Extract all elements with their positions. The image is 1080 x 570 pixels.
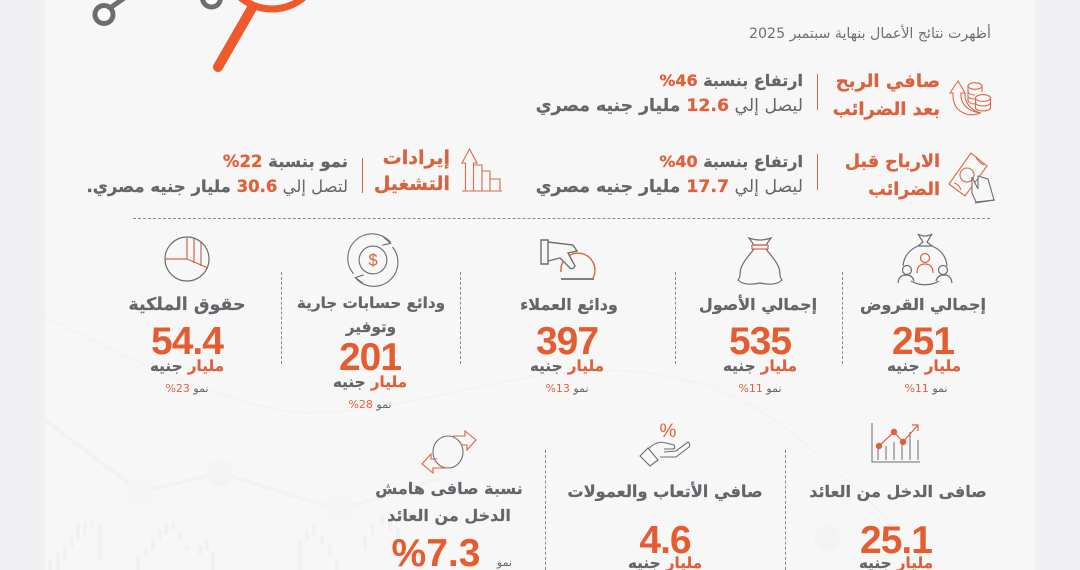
value: 25.1 — [860, 519, 932, 562]
unit: مليار جنيه — [887, 357, 961, 375]
text: pre-tax figures: ارتفاع بنسبة 40% — [659, 152, 803, 171]
icon: rising coins — [949, 80, 992, 116]
metric: net interest income — [809, 423, 987, 570]
label — [297, 294, 445, 336]
icon: money sack — [737, 236, 783, 285]
heading: profit before tax: الضرائب — [868, 180, 940, 200]
label: ودائع العملاء — [520, 295, 618, 314]
unit: مليار جنيه — [333, 373, 407, 391]
value: 54.4 — [151, 320, 223, 363]
icon: pie chart — [164, 236, 210, 282]
unit: مليار جنيه — [723, 357, 797, 375]
growth: نمو 23% — [165, 382, 209, 395]
label: إجمالي القروض — [860, 295, 986, 314]
text: revenue figures: نمو بنسبة 22% — [223, 152, 348, 171]
growth: نمو 11% — [904, 382, 948, 395]
metric: total loans — [860, 234, 986, 395]
label: وتوفير — [346, 318, 396, 336]
divider — [362, 158, 363, 193]
label: نسبة صافى هامش — [375, 479, 523, 498]
heading: operating revenue — [374, 147, 450, 195]
label: صافى الدخل من العائد — [809, 482, 987, 501]
panel: net profit after tax — [536, 71, 992, 120]
label: إجمالي الأصول — [699, 295, 817, 314]
metric: net fees and commissions — [567, 421, 763, 570]
icon: dollar cycle: $ — [368, 251, 378, 270]
heading: net profit: صافي الربح — [836, 71, 940, 92]
label: صافي الأتعاب والعمولات — [567, 482, 763, 501]
label: الدخل من العائد — [387, 506, 511, 525]
label: حقوق الملكية — [128, 295, 246, 315]
icon: magnifying glass — [213, 0, 306, 72]
icon: hand with percent — [639, 421, 690, 467]
icon: hand with banknote — [948, 152, 996, 204]
divider line — [133, 218, 990, 219]
unit: مليار جنيه — [530, 357, 604, 375]
text: net profit figures — [536, 71, 803, 116]
metric: current and savings deposits — [297, 233, 445, 411]
text: net profit figures: ارتفاع بنسبة 46% — [659, 71, 803, 90]
value: 251 — [892, 320, 954, 363]
value: 535 — [729, 320, 791, 363]
unit: مليار جنيه — [150, 357, 224, 375]
icon: network nodes — [92, 0, 223, 26]
heading: profit before tax: الارباح قبل — [845, 152, 940, 172]
heading: operating revenue: إيرادات — [383, 147, 450, 169]
intro text: أظهرت نتائج الأعمال بنهاية سبتمبر 2025 — [749, 26, 991, 42]
heading: operating revenue: التشغيل — [374, 173, 450, 195]
icon: money bag with people — [897, 234, 953, 286]
growth: نمو 11% — [738, 382, 782, 395]
icon: line chart — [872, 423, 920, 462]
growth: نمو 28% — [348, 398, 392, 411]
divider — [817, 154, 818, 190]
text: pre-tax figures: ليصل إلي 17.7 مليار جنيه مصري — [536, 177, 803, 197]
icon: rising bars — [461, 148, 502, 192]
text: revenue figures — [86, 152, 348, 196]
growth: نمو — [497, 556, 512, 569]
icon: hand depositing coin — [540, 239, 596, 280]
growth: نمو 13% — [545, 382, 589, 395]
value: 201 — [339, 336, 401, 379]
metric: net interest margin — [360, 420, 530, 570]
panel: profit before tax — [536, 152, 996, 204]
label: ودائع حسابات جارية — [297, 294, 445, 312]
divider — [817, 74, 818, 110]
label — [364, 475, 534, 529]
icon: dollar cycle — [347, 233, 398, 287]
text: pre-tax figures — [536, 152, 803, 197]
value: 4.6 — [639, 519, 691, 562]
heading: profit before tax — [845, 152, 940, 200]
icon: coin with exchange arrows — [420, 428, 478, 476]
heading: net profit: بعد الضرائب — [833, 99, 940, 120]
heading: net profit — [833, 71, 940, 120]
metric: equity — [128, 236, 246, 395]
panel: operating revenue — [86, 147, 502, 196]
icon: hand with percent: % — [660, 421, 677, 442]
metric: total assets — [699, 236, 817, 395]
text: net profit figures: ليصل إلي 12.6 مليار جنيه مصري — [536, 96, 803, 116]
value: 397 — [536, 320, 598, 363]
metric: customer deposits — [520, 239, 618, 395]
text: revenue figures: لتصل إلي 30.6 مليار جنيه مصري. — [86, 177, 348, 196]
